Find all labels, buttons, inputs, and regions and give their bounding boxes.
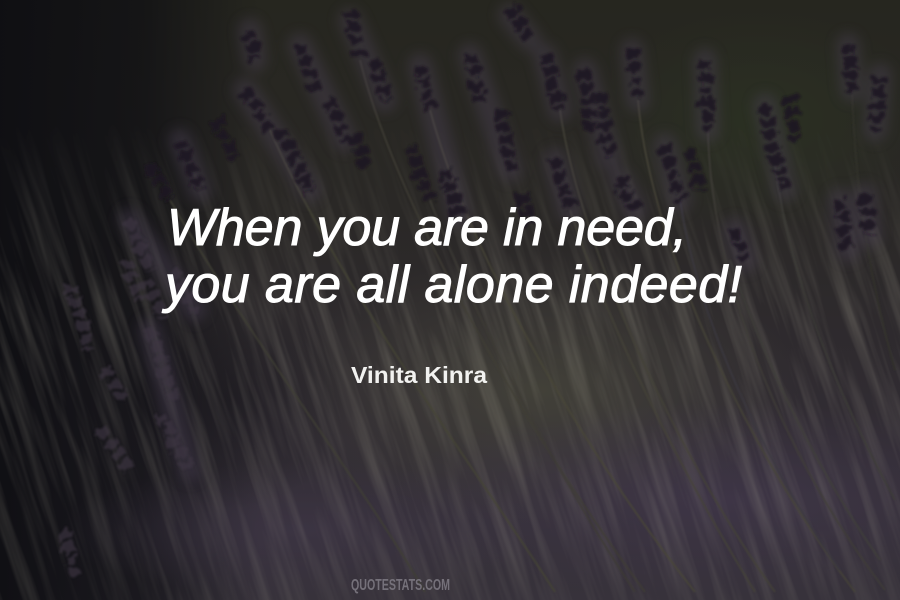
lavender flower spikes: dim left blooms [65,220,195,575]
quote text [162,199,742,314]
watermark: QUOTESTATS.COM [351,577,450,594]
quote text: When you are in need, [167,199,687,257]
grass stem texture [0,161,900,600]
lavender flower spikes: upper dark blooms [150,8,880,260]
author name: Vinita Kinra [351,362,487,388]
lavender stems [170,60,895,592]
quote text: you are all alone indeed! [162,256,742,314]
purple haze behind flowers [130,15,880,470]
